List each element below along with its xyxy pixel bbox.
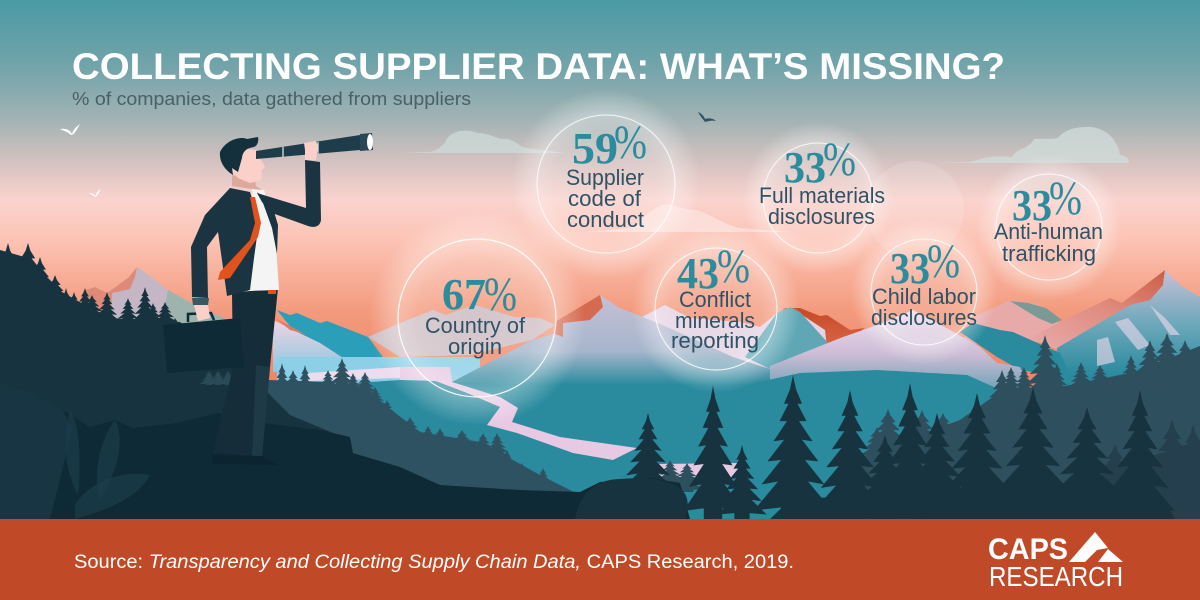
- bubble: supplier code of conduct 59%: code of: [568, 186, 642, 211]
- bubble: anti-human trafficking 33%: Anti-human: [994, 219, 1103, 244]
- briefcase: [163, 313, 244, 373]
- cloud: right: [927, 127, 1129, 163]
- necktie: [218, 197, 261, 280]
- forest: lower-left mid hill: [260, 358, 580, 519]
- title: COLLECTING SUPPLIER DATA: WHAT’S MISSING?: [72, 46, 1005, 87]
- bubble: supplier code of conduct 59%: [511, 89, 701, 279]
- man with telescope and briefcase: [163, 133, 373, 465]
- bubble: anti-human trafficking 33%: %: [1049, 172, 1082, 225]
- bubble: full materials disclosures 33%: [742, 122, 894, 274]
- bubble: supplier code of conduct 59%: Supplier: [566, 165, 644, 190]
- bubble: conflict minerals reporting 43%: minerals: [675, 308, 755, 333]
- sky background: [0, 0, 1200, 400]
- bubble: child labor disclosures 33%: Child labor: [872, 284, 976, 309]
- bird: white large: [60, 124, 80, 135]
- river distant segment: [657, 463, 745, 480]
- bubble: child labor disclosures 33%: 33: [890, 244, 930, 293]
- mountain: teal ridge right of 43 percent bubble: [745, 307, 830, 369]
- trouser highlight: [252, 365, 270, 457]
- logo: CAPS Research: CAPS: [988, 533, 1068, 566]
- telescope: [256, 133, 373, 159]
- mountains: left blue ridge and lilac slope: [273, 310, 392, 372]
- hair: [220, 137, 258, 175]
- bubble: country of origin 67%: 67: [442, 270, 486, 319]
- bubble: supplier code of conduct 59%: conduct: [567, 207, 644, 232]
- cloud: centre: [586, 205, 790, 232]
- bubble: full materials disclosures 33%: Full materials: [759, 183, 885, 208]
- bubble: full materials disclosures 33%: %: [823, 133, 856, 186]
- belt detail: [268, 290, 276, 294]
- bubble: child labor disclosures 33%: disclosures: [871, 305, 977, 330]
- foreground plants: [0, 383, 150, 519]
- bubble: conflict minerals reporting 43%: Conflict: [679, 287, 751, 312]
- mountain: lilac slope behind 43 percent bubble: [640, 305, 830, 375]
- bubble: anti-human trafficking 33%: 33: [1012, 181, 1052, 230]
- mountains: right pink range with red peak: [960, 270, 1200, 420]
- mountain: central peak with orange face: [452, 295, 800, 420]
- bird: white small: [89, 189, 101, 197]
- foreground hill: [0, 383, 690, 519]
- forest: centre small medium trees: [649, 460, 708, 492]
- mountain: central lilac ridge right: [770, 310, 1072, 390]
- bubble: conflict minerals reporting 43%: %: [717, 240, 750, 293]
- bubble: conflict minerals reporting 43%: [632, 225, 800, 393]
- bubble: anti-human trafficking 33%: [976, 154, 1122, 300]
- bubble: conflict minerals reporting 43%: 43: [677, 249, 719, 298]
- trees faint behind man: [199, 371, 238, 385]
- bubble: supplier code of conduct 59%: 59: [572, 124, 618, 173]
- faint circle behind child labor bubble: [866, 161, 964, 259]
- forest: mid-right medium trees: [848, 333, 1200, 519]
- bubble: full materials disclosures 33%: disclosures: [768, 204, 875, 229]
- bubble: country of origin 67%: origin: [448, 334, 502, 359]
- rock: [575, 478, 688, 519]
- cloud: left: [400, 131, 565, 153]
- river: [400, 367, 637, 460]
- bird: dark: [698, 112, 716, 122]
- bubble: child labor disclosures 33%: [851, 219, 997, 365]
- lower hand: [194, 305, 210, 321]
- face: [232, 148, 265, 183]
- bubble: country of origin 67%: [369, 210, 585, 426]
- neck: [232, 175, 262, 190]
- bubble: country of origin 67%: %: [484, 268, 517, 321]
- forest: dark right foreground trees: [621, 375, 1175, 519]
- bubble: supplier code of conduct 59%: %: [614, 116, 647, 169]
- lake: [277, 357, 480, 400]
- lilac strip of lake: [308, 367, 452, 382]
- mountains: ridge behind 67 percent bubble: [368, 305, 555, 357]
- cuff: [192, 298, 209, 305]
- shirt: [248, 188, 279, 291]
- forest: left dark hill and trees: [0, 243, 360, 519]
- logo: CAPS Research: [988, 532, 1123, 592]
- footer band: [0, 519, 1200, 600]
- trousers: [213, 288, 278, 457]
- bubble: conflict minerals reporting 43%: reporting: [671, 328, 759, 353]
- bubble: anti-human trafficking 33%: trafficking: [1002, 241, 1096, 266]
- raised hand: [304, 141, 318, 160]
- far right red ridge: [760, 308, 865, 350]
- logo: CAPS Research: RESEARCH: [989, 561, 1123, 592]
- bubble: child labor disclosures 33%: %: [927, 235, 960, 288]
- jacket right lapel: [257, 192, 278, 254]
- shoes: [212, 455, 277, 465]
- subtitle: % of companies, data gathered from suppliers: [72, 89, 471, 109]
- mountains: far left peak: [83, 267, 235, 330]
- source citation: Source: Transparency and Collecting Supply Chain Data, CAPS Research, 2019.: [74, 552, 794, 573]
- valley teal: [280, 370, 1200, 519]
- raised arm sleeve: [257, 160, 321, 227]
- bubble: country of origin 67%: Country of: [425, 313, 526, 338]
- forest: far right back trees: [1079, 419, 1200, 519]
- jacket and left arm: [191, 188, 259, 298]
- bubble: full materials disclosures 33%: 33: [784, 143, 826, 192]
